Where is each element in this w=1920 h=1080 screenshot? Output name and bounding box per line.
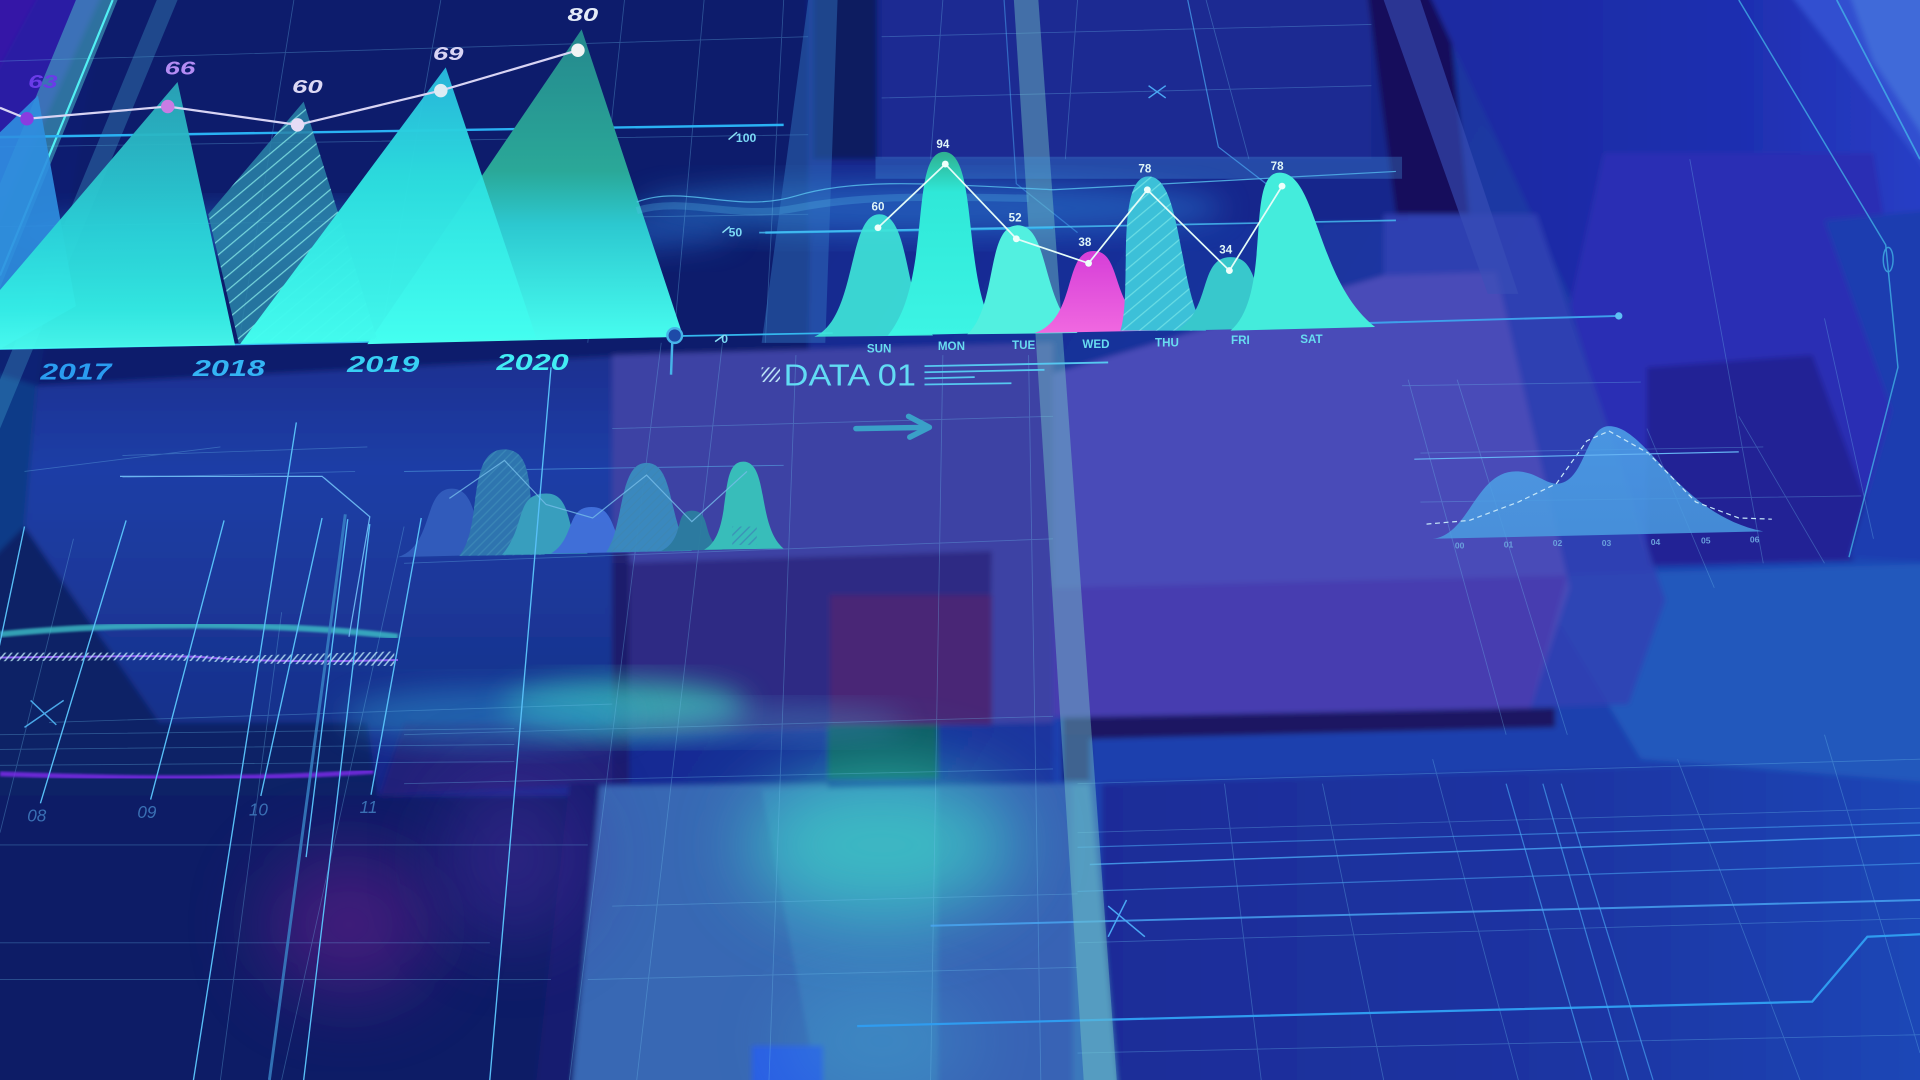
bell: SAT: [1231, 173, 1375, 331]
axis labels: 100: [736, 131, 757, 145]
axis labels: [1455, 534, 1760, 551]
chart: mini bells: [398, 449, 784, 557]
value labels: 80: [568, 4, 599, 25]
bell: TUE: [967, 225, 1078, 334]
ribbon: teal: [0, 625, 398, 637]
axis labels: 05: [1701, 536, 1711, 546]
month labels: 10: [249, 800, 268, 820]
value labels: [28, 4, 599, 97]
left ribbons and lines: [0, 367, 551, 1080]
day labels: THU: [1155, 337, 1179, 350]
day labels: MON: [938, 340, 965, 353]
bell: SUN: [814, 214, 933, 337]
value labels: 52: [1009, 212, 1022, 225]
dashed trend: [1427, 431, 1772, 524]
panel: lower floor: [1053, 576, 1920, 1080]
panel: top left dark field: [37, 0, 814, 392]
cross mark: [24, 700, 64, 727]
value labels: 66: [165, 58, 196, 79]
peak: 2020: [367, 29, 683, 344]
day labels: WED: [1082, 338, 1109, 351]
bell: WED: [1035, 251, 1157, 333]
value labels: 34: [1219, 243, 1233, 256]
axis labels: 03: [1602, 538, 1612, 548]
axis labels: 06: [1750, 534, 1760, 544]
month labels: 09: [137, 802, 157, 822]
value labels: 94: [936, 138, 950, 151]
month labels: [27, 797, 377, 826]
peak: 2018 hatched: [208, 102, 377, 343]
year labels: 2018: [191, 355, 265, 381]
day labels: TUE: [1012, 339, 1036, 352]
chart: yearly peaks: [0, 4, 1053, 385]
value labels: 38: [1078, 236, 1092, 249]
year labels: [39, 349, 569, 385]
axis pin: [667, 328, 682, 375]
timeline lines: [0, 367, 551, 1080]
bell: THU hatched: [1120, 176, 1206, 331]
axis line: 100: [0, 125, 784, 137]
peak: 2017: [0, 82, 235, 350]
axis labels: 02: [1553, 538, 1563, 548]
axis labels: [721, 131, 757, 346]
panel: center slab: [612, 343, 1053, 735]
bell: MON: [888, 152, 998, 336]
axis labels: 0: [721, 332, 728, 346]
panel: top right field: [1420, 0, 1920, 514]
trend line: [0, 50, 578, 125]
glow accents: [0, 181, 1224, 1080]
wave ribbon behind charts: [637, 157, 1402, 233]
value labels: 63: [28, 71, 58, 92]
value labels: [871, 138, 1284, 256]
trend markers: [20, 43, 585, 132]
panel: top center field: [808, 0, 1408, 233]
value labels: 60: [292, 76, 324, 97]
axis labels: 01: [1504, 539, 1514, 549]
axis labels: 00: [1455, 541, 1465, 551]
value labels: 69: [433, 43, 465, 64]
mini bell fills: [398, 449, 784, 557]
title: DATA 01: DATA 01: [784, 359, 916, 393]
month labels: 11: [360, 797, 377, 817]
peak: 2019: [240, 67, 536, 344]
chart: right distribution: [1414, 426, 1772, 551]
month labels: 08: [27, 806, 47, 826]
panel: center right box: [1043, 272, 1570, 718]
day labels: FRI: [1231, 334, 1250, 347]
diagonal light beams: [0, 0, 1518, 1080]
panel: right dark block: [1570, 153, 1916, 566]
value labels: 60: [871, 201, 884, 214]
chart: weekly bells: [814, 138, 1622, 356]
panel: left blue slab: [24, 355, 637, 735]
mini trend line: [449, 460, 747, 522]
bell: FRI: [1176, 257, 1286, 331]
ribbon: purple: [0, 771, 373, 778]
panel: bottom teal slab: [563, 784, 828, 1080]
value labels: 78: [1271, 160, 1284, 173]
ribbon: hatched: [0, 651, 398, 666]
arrow: [856, 416, 929, 437]
top right accent lines: [1739, 0, 1920, 557]
distribution area: [1433, 426, 1763, 539]
day labels: [867, 333, 1323, 356]
day labels: SUN: [867, 343, 891, 356]
title: DATA 01: [762, 359, 1108, 393]
year labels: 2017: [39, 359, 113, 385]
bright circuit lines lower right: [857, 0, 1920, 1080]
axis labels: 50: [729, 225, 742, 239]
year labels: 2020: [495, 349, 569, 375]
axis labels: 04: [1651, 537, 1661, 547]
trend markers: [875, 161, 1285, 274]
day labels: SAT: [1300, 333, 1323, 346]
peak: 2016 partial: [0, 96, 76, 349]
value labels: 78: [1138, 163, 1152, 176]
trend line: [878, 164, 1282, 271]
year labels: 2019: [346, 351, 419, 377]
